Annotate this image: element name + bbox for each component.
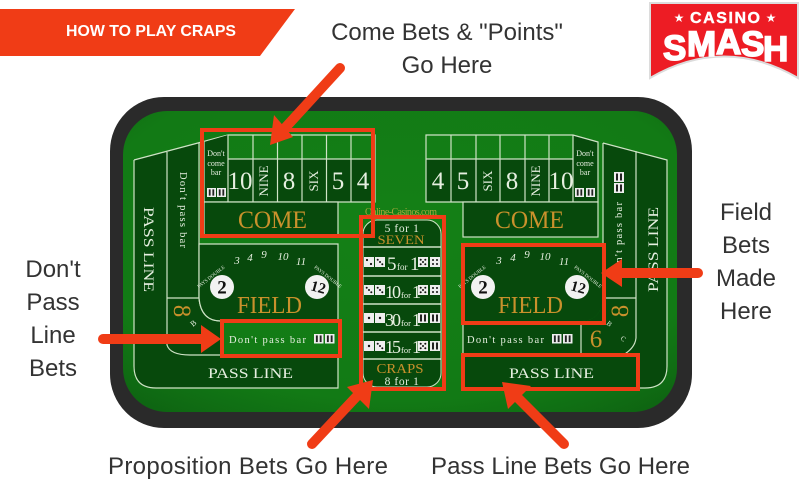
arrow: don't pass line [103,325,221,353]
label: don't pass line bets: Bets [29,355,77,382]
right field: 11 [559,256,569,268]
label: proposition bets: Proposition Bets Go Here [108,453,388,480]
left number grid: Don't [207,149,225,158]
right field: PAYS DOUBLE [458,265,487,290]
row: 30 for 1 [364,310,440,330]
row: 5 for 1: 5 [387,254,396,275]
logo: Casino Smash: SMASH [663,23,788,69]
row: 5 for 1 [364,254,440,275]
right side layout [426,135,667,388]
left come box [204,202,338,237]
right come box [463,202,598,237]
center proposition bets: Online-Casinos.com [365,207,437,218]
right number grid: 10 [548,168,574,195]
left field: 4 [247,252,253,264]
row: 5 for 1: 1 [410,254,420,275]
left number grid: bar [211,168,221,177]
right field: 2 [478,278,488,298]
left come box: COME [238,207,307,234]
header banner: How to play craps [0,9,295,56]
left field: 9 [261,249,267,261]
right pass line area [463,143,667,388]
header banner: How to play craps: HOW TO PLAY CRAPS [66,23,236,40]
table rail [110,97,692,428]
logo: Casino Smash: ★ [766,11,776,25]
left don't pass bar [229,334,334,346]
row: 10 for 1: 10 [385,282,401,302]
left field: 11 [296,256,306,268]
label: field bets: Here [720,298,772,325]
right number grid: 8 [506,168,518,195]
right number grid: SIX [480,170,495,191]
left field: 2 [217,278,227,298]
table felt [123,111,677,412]
center proposition bets: CRAPS [376,361,424,376]
highlight: don't pass bar [222,321,340,356]
highlight: proposition bets [361,217,444,389]
label: come bets: Come Bets & "Points" [331,19,563,46]
label: don't pass line bets: Line [30,322,76,349]
logo: Casino Smash: ★ [674,11,684,25]
row: 15 for 1: for [401,345,411,355]
label: don't pass line bets: Don't [25,256,81,283]
right number grid: 4 [432,168,445,195]
label: field bets [716,199,776,325]
row: 10 for 1: 1 [412,282,421,302]
right field: PAYS DOUBLE [573,265,602,290]
right number grid: bar [580,168,590,177]
arrow: proposition bets [312,380,373,444]
center proposition bets: 5 for 1 [385,223,419,235]
left number grid: 5 [332,168,344,195]
label: field bets: Bets [722,232,770,259]
right number grid: 5 [457,168,469,195]
left don't pass bar: Don't pass bar [229,335,306,346]
left field: PAYS DOUBLE [197,265,226,290]
left number grid [204,135,375,237]
left vertical pass labels: 8 [168,305,195,317]
right field: 4 [510,252,516,264]
label: don't pass line bets [25,256,81,382]
row: 30 for 1: 1 [412,310,421,330]
left field: PAYS DOUBLE [313,265,342,290]
row: 30 for 1: for [401,318,411,328]
arrow: pass line bets [502,382,564,444]
craps table [110,97,692,428]
row: 15 for 1 [364,337,440,357]
right number grid [426,135,598,202]
left vertical pass labels [140,172,198,329]
label: pass line bets: Pass Line Bets Go Here [431,453,690,480]
left vertical pass labels: B [189,318,198,329]
highlight: pass line [463,355,638,389]
highlight: field [463,245,604,323]
center proposition bets: SEVEN [378,232,425,247]
right field: 3 [495,255,502,267]
left side layout [134,135,375,388]
right number grid: come [576,159,594,168]
left vertical pass labels: PASS LINE [140,207,156,292]
row: 15 for 1: 1 [412,337,421,357]
right don't pass bar: Don't pass bar [467,335,544,346]
right field [458,244,603,321]
right field: FIELD [498,293,563,319]
row: 5 for 1: for [397,262,408,272]
right number grid: Don't [576,149,594,158]
right come box: COME [495,207,564,234]
left field: 12 [309,278,327,298]
left field [197,244,342,321]
center proposition bets: 8 for 1 [385,376,419,388]
left vertical pass labels: Don't pass bar [177,172,188,248]
label: come bets: Go Here [402,52,492,79]
label: don't pass line bets: Pass [26,289,80,316]
left number grid: 4 [357,168,370,195]
right number grid: NINE [528,165,543,197]
left number grid: 10 [228,168,252,195]
left field: 3 [233,255,240,267]
right vertical pass labels: Don't pass bar [614,202,625,278]
right vertical pass labels: 8 [607,305,634,317]
center proposition bets [363,207,441,388]
right vertical pass labels: B [605,319,614,329]
right vertical pass labels: PASS LINE [646,207,662,292]
arrow: come bets [270,68,340,145]
row: 30 for 1: 30 [385,310,401,330]
left pass line: PASS LINE [208,366,293,382]
right vertical pass labels: C [619,334,628,344]
left number grid: NINE [256,165,271,197]
right don't pass bar [467,334,572,346]
right pass line: PASS LINE [509,366,594,382]
left number grid: 8 [283,168,295,195]
left number grid: SIX [306,170,321,191]
row: 10 for 1 [364,282,440,302]
label: come bets [331,19,563,79]
logo: Casino Smash [650,3,798,78]
highlight: come bets [202,130,373,236]
left field: 10 [278,251,289,263]
right field: 9 [524,249,530,261]
right vertical pass labels [590,172,662,353]
right field: 12 [569,278,587,298]
logo: Casino Smash: CASINO [690,10,760,27]
label: field bets: Made [716,265,776,292]
right field: 10 [540,251,551,263]
highlight boxes [202,130,638,389]
arrow: field bets [601,259,698,287]
right vertical pass labels: 6 [590,326,602,353]
row: 10 for 1: for [401,290,411,300]
left field: FIELD [237,293,302,319]
row: 15 for 1: 15 [385,337,401,357]
left pass line area [134,143,338,388]
label: field bets: Field [720,199,772,226]
left number grid: come [207,159,225,168]
